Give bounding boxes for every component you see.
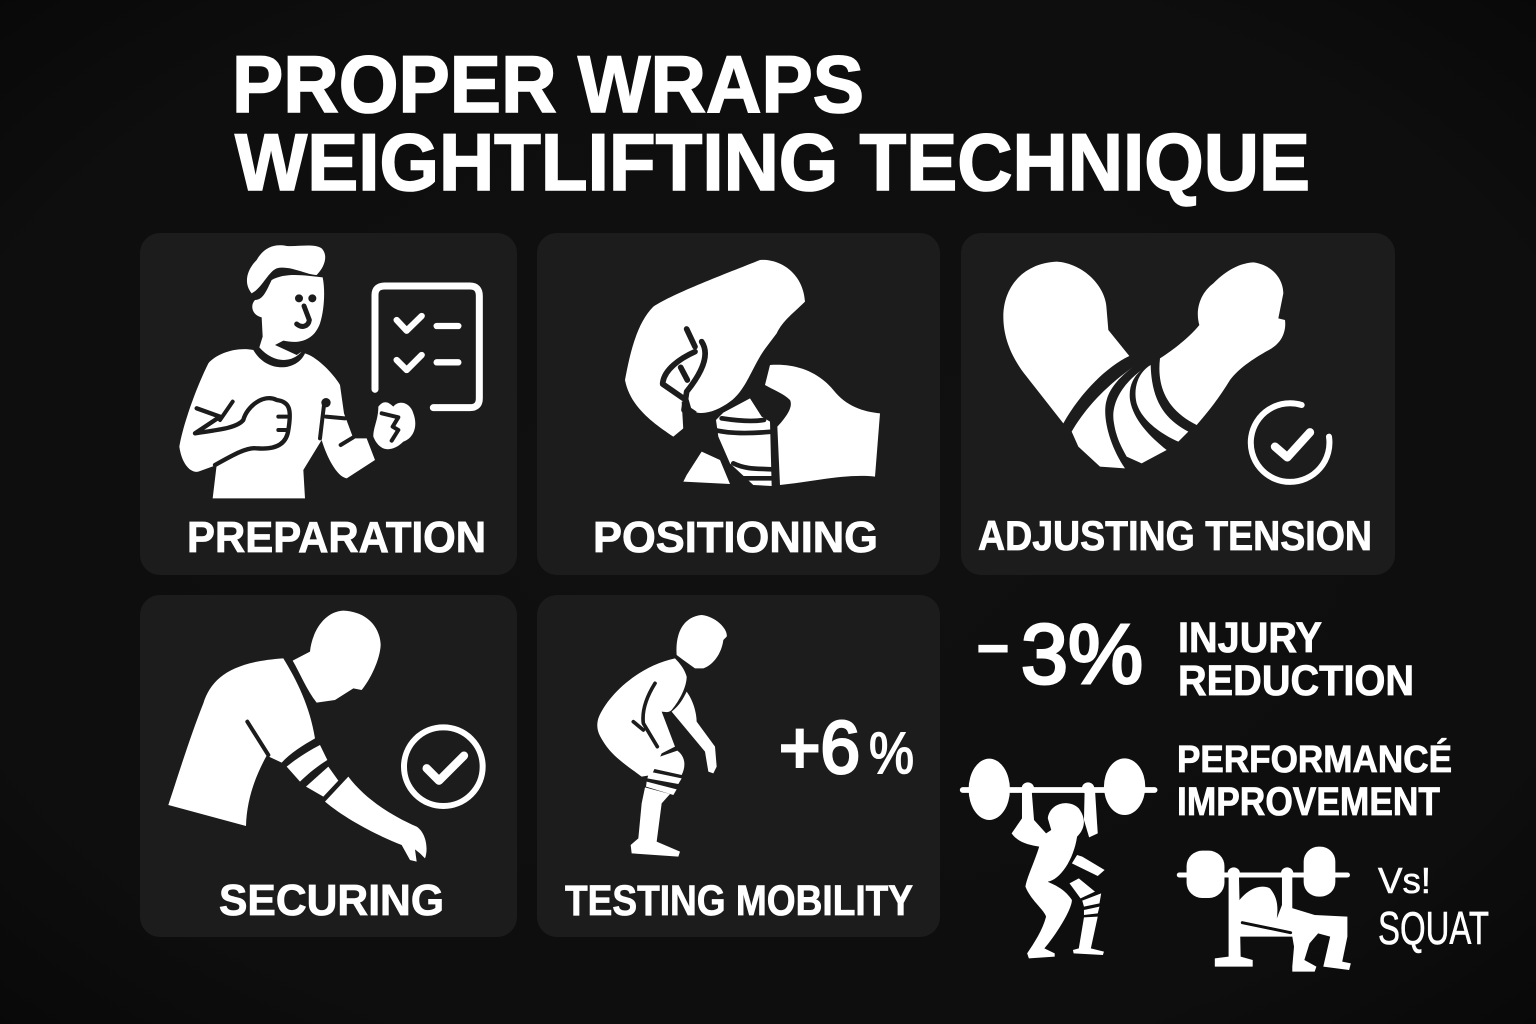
stat: performance improvement: IMPROVEMENT	[1177, 780, 1440, 824]
label: securing: SECURING	[219, 876, 444, 925]
icon: person with checklist	[179, 245, 479, 498]
label: adjusting tension: ADJUSTING TENSION	[978, 512, 1372, 559]
icon: overhead lifter	[963, 758, 1155, 958]
label: vs squat: SQUAT	[1378, 902, 1489, 954]
title: WEIGHTLIFTING TECHNIQUE	[235, 118, 1310, 208]
panel: adjusting tension	[961, 233, 1395, 575]
stat: injury reduction: −	[976, 609, 1010, 687]
panel: preparation	[140, 233, 517, 575]
stat: injury reduction: 3%	[1021, 607, 1143, 701]
label: vs squat	[1378, 860, 1489, 954]
stat: injury reduction	[976, 607, 1414, 705]
panel: positioning	[537, 233, 940, 575]
panel: securing	[140, 595, 517, 937]
icon: person squatting with knee wrap	[597, 615, 727, 857]
panel: testing mobility	[537, 595, 940, 937]
icon: squat lifter	[1179, 847, 1351, 972]
title: PROPER WRAPS	[232, 40, 864, 130]
icon: hands wrapping wrist	[625, 260, 880, 487]
stat: +6%: %	[869, 721, 914, 786]
label: vs squat: Vs!	[1378, 860, 1431, 901]
stat: injury reduction: INJURY	[1178, 614, 1322, 662]
stat: performance improvement	[1177, 737, 1452, 824]
title	[232, 40, 1310, 208]
icon: person securing arm wrap	[168, 611, 483, 862]
label: testing mobility: TESTING MOBILITY	[565, 877, 913, 925]
label: positioning: POSITIONING	[593, 513, 878, 562]
label: preparation: PREPARATION	[187, 513, 486, 562]
stat: +6%	[779, 706, 914, 789]
stat: performance improvement: PERFORMANCÉ	[1177, 737, 1452, 781]
stat: injury reduction: REDUCTION	[1178, 657, 1414, 705]
stat: +6%: +6	[779, 706, 860, 789]
icon: wrapped arm	[1003, 262, 1329, 482]
